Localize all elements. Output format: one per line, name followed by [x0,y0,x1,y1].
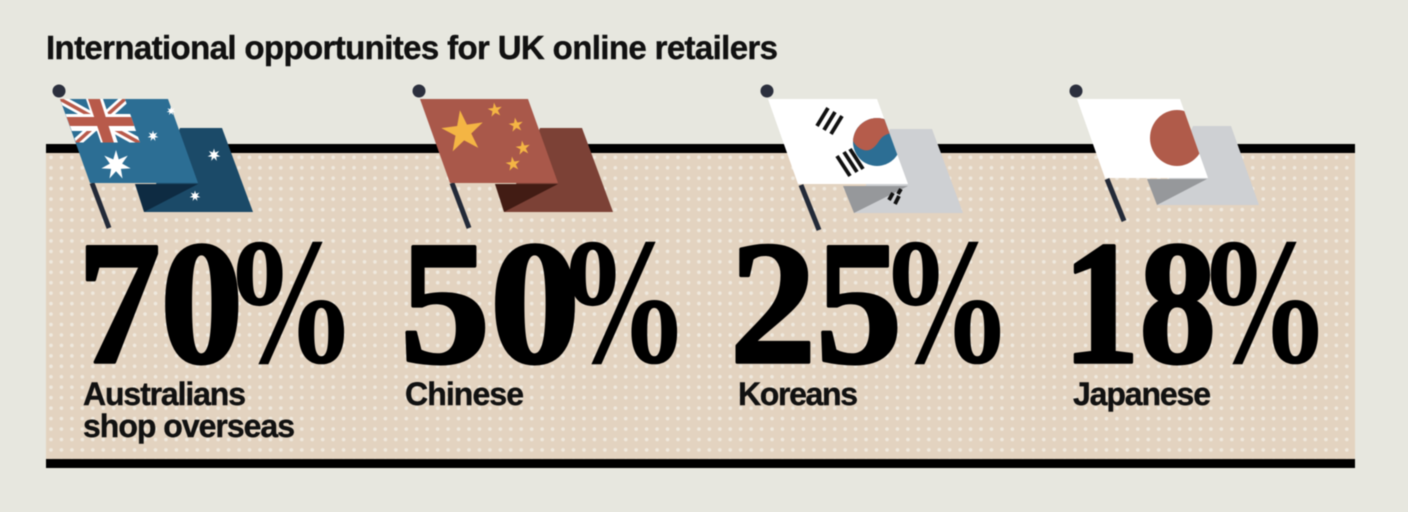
icon: Australian flag [52,84,253,228]
icon: Korean flag [760,84,963,230]
statistic: 70% Australians [78,206,347,444]
statistic: 25% Koreans: 25 [730,206,902,401]
statistic: 25% Koreans: Koreans [738,376,858,412]
statistic: 50% Chinese: 50 [400,206,580,401]
statistic: 25% Koreans: % [890,211,1003,401]
statistic: 50% Chinese: Chinese [405,376,524,412]
statistic: 18% Japanese: 18 [1063,206,1216,401]
statistic: 70% Australians: shop overseas [83,408,295,444]
icon: Japanese flag [1070,84,1259,221]
statistic: 70% Australians: % [234,211,347,401]
title: International opportunites for UK online retailers [46,29,778,66]
statistic: 25% Koreans [730,206,1003,412]
statistic: 50% Chinese [400,206,680,412]
panel: statistics band [46,144,1355,468]
statistic: 18% Japanese: % [1208,211,1321,401]
statistic: 18% Japanese: Japanese [1073,376,1211,412]
statistic: 70% Australians: 70 [78,206,243,401]
statistic: 18% Japanese [1063,206,1321,412]
statistic: 70% Australians: Australians [83,376,246,412]
statistic: 50% Chinese: % [567,211,680,401]
icon: Chinese flag [412,84,613,228]
